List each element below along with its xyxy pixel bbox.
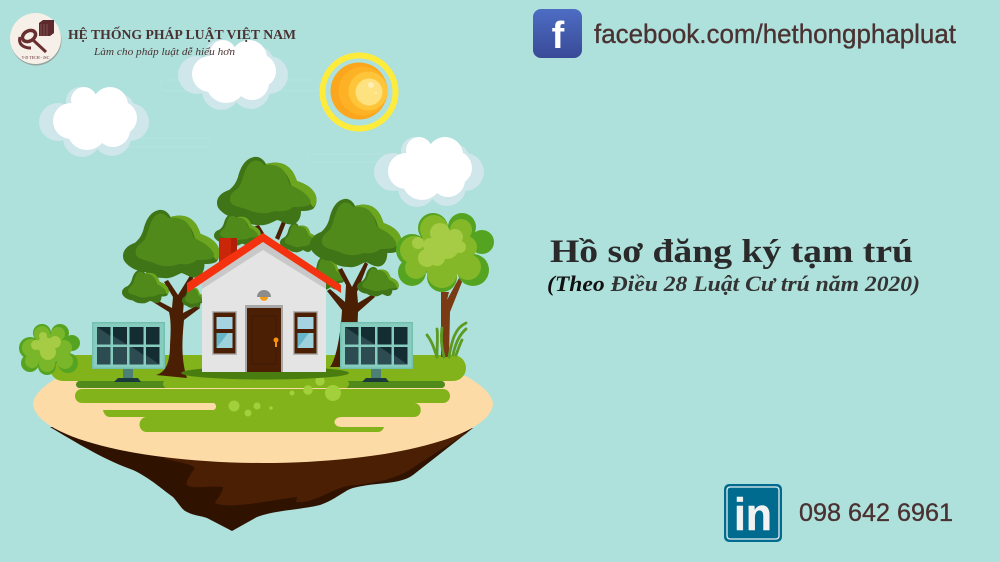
solar panel: right — [340, 322, 413, 382]
grass tuft — [427, 323, 466, 357]
light grass strip — [163, 380, 349, 388]
sand top — [33, 376, 493, 463]
icon: linkedin — [724, 484, 782, 542]
floating island — [33, 355, 493, 531]
tree: rear crowns — [214, 157, 345, 290]
facebook address: facebook.com/hethongphapluat — [594, 19, 956, 49]
tree: left — [122, 210, 220, 378]
cloud: right — [374, 137, 484, 207]
icon: facebook: f — [552, 15, 565, 57]
wall lamp — [257, 290, 271, 301]
cloud: top middle — [178, 40, 288, 110]
icon: facebook — [533, 9, 582, 58]
tree foliage — [396, 213, 494, 292]
grass row one — [75, 389, 450, 403]
logo title: HỆ THỐNG PHÁP LUẬT VIỆT NAM — [68, 25, 296, 43]
bush — [19, 324, 80, 375]
icon: linkedin: in — [734, 489, 772, 540]
cloud: left — [39, 87, 149, 157]
logo ring label: V-D TECH - JSC — [22, 55, 50, 60]
tree: right — [310, 199, 402, 367]
tree: right small — [396, 213, 494, 357]
tree: rear tree trunks — [255, 219, 287, 242]
house shadow — [181, 366, 349, 380]
door — [245, 305, 283, 372]
window: left — [212, 311, 237, 355]
sun — [322, 56, 396, 128]
title: Hồ sơ đăng ký tạm trú — [550, 234, 913, 270]
underside light soil — [163, 433, 467, 505]
house wall — [202, 242, 326, 372]
grass dots — [228, 376, 341, 416]
logo tagline: Làm cho pháp luật dễ hiểu hơn — [93, 47, 235, 58]
subtitle: (Theo Điều 28 Luật Cư trú năm 2020) — [547, 271, 920, 296]
phone number: 098 642 6961 — [799, 499, 953, 527]
icon: book stack cube — [39, 20, 54, 36]
chimney — [219, 238, 237, 268]
house — [187, 233, 341, 372]
window: right — [293, 311, 318, 355]
solar panel: left — [92, 322, 165, 382]
grass row two — [103, 403, 421, 432]
roof — [187, 233, 341, 293]
island underside — [50, 427, 473, 531]
wall shadow under roof — [202, 242, 326, 289]
logo — [10, 13, 62, 66]
dark grass strip — [76, 381, 445, 388]
icon: gavel — [20, 28, 46, 52]
grass base — [50, 355, 466, 381]
